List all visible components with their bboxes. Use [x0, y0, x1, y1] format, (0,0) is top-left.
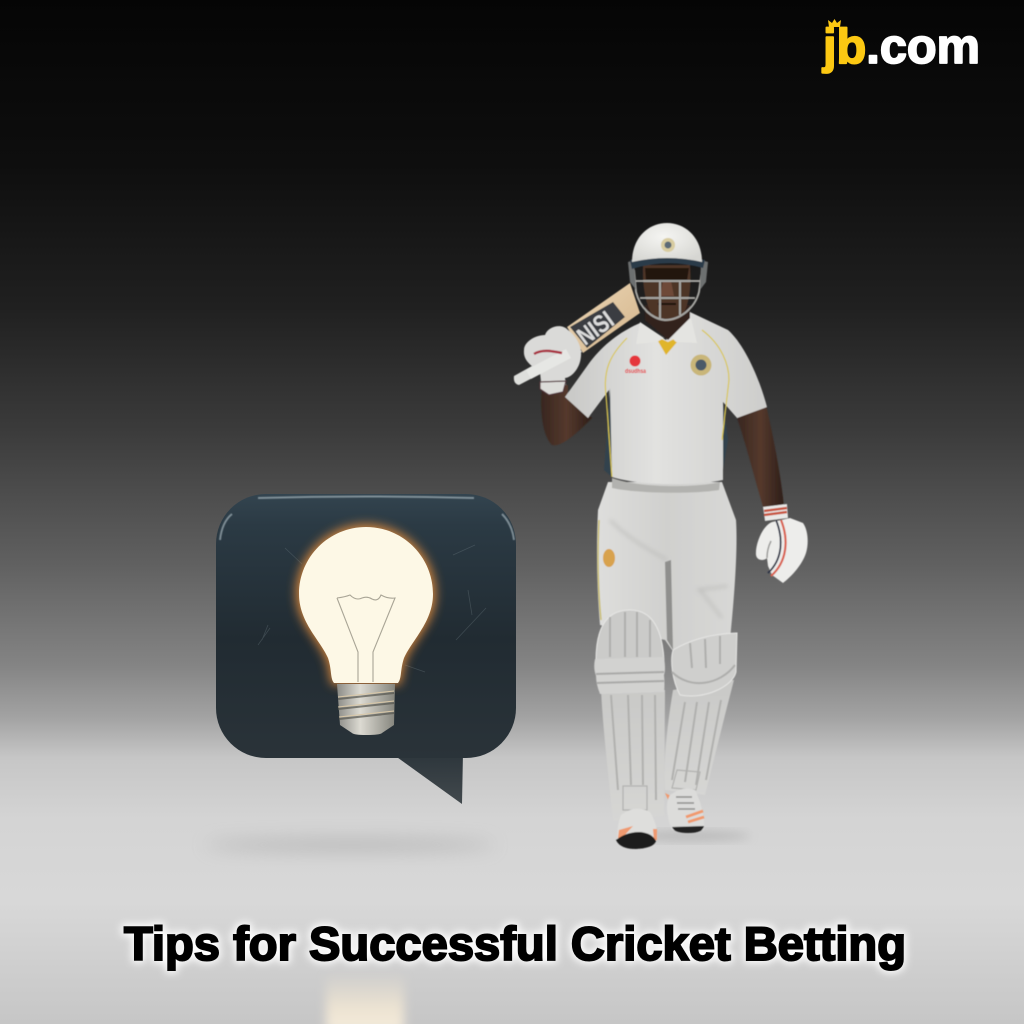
- trousers yellow piping: [598, 520, 601, 620]
- head and helmet: [628, 223, 708, 340]
- mouth shadow: [658, 303, 676, 305]
- bat sticker: [570, 302, 625, 348]
- glove body: [756, 518, 808, 583]
- bulb screw base: [337, 684, 395, 735]
- icon: light bulb: [296, 524, 436, 735]
- upper: [667, 788, 704, 830]
- shirt waistband: [612, 478, 720, 493]
- shirt side panels: [604, 388, 728, 477]
- glove red accent: [534, 351, 562, 354]
- neck: [645, 305, 690, 340]
- sole: [672, 826, 704, 833]
- title white glow: Tips for Successful Cricket Betting: [124, 917, 906, 970]
- bat sticker letters: NISI: [572, 306, 619, 351]
- helmet crest: [661, 238, 675, 252]
- cuff stripes: [764, 508, 787, 515]
- orange toe accents: [618, 826, 657, 840]
- trousers: [597, 482, 737, 650]
- right shoe: [665, 788, 704, 833]
- strap patch: [672, 770, 700, 790]
- shirt yellow piping: [605, 330, 729, 477]
- gap between thighs: [665, 560, 673, 650]
- right batting pad: [665, 633, 737, 795]
- floor shadow under player: [630, 831, 750, 841]
- nose: [660, 281, 674, 296]
- shirt yellow collar inset: [655, 334, 684, 355]
- left shoe: [616, 809, 657, 849]
- cuff: [763, 504, 788, 521]
- player right arm, lowered: [737, 405, 784, 510]
- thumb gap: [767, 541, 771, 558]
- glove body: [524, 326, 581, 385]
- orange stripes: [686, 811, 704, 822]
- bubble glossy highlight: [220, 496, 514, 540]
- cricket player: [514, 223, 808, 849]
- icon: crown: [828, 19, 841, 27]
- trouser crease shadows: [610, 520, 728, 618]
- floor shadow under speech bubble: [205, 839, 495, 851]
- laces: [676, 797, 695, 809]
- shin ribs: [672, 700, 721, 785]
- shirt collar: [636, 314, 697, 344]
- speech bubble with light bulb: [216, 494, 516, 804]
- handle over glove: [526, 349, 571, 379]
- shirt crest badge: [690, 354, 712, 376]
- title text: Tips for Successful Cricket Betting: [124, 917, 906, 970]
- bulb glow: [296, 524, 436, 685]
- cricket bat: [514, 283, 640, 385]
- knee rolls: [594, 657, 665, 694]
- bat handle: [514, 342, 582, 385]
- sponsor name: dsudhsa: [625, 369, 647, 375]
- trouser badge: [603, 549, 615, 567]
- upper: [617, 809, 657, 842]
- bulb glass: [299, 527, 433, 683]
- scratches on bubble: [258, 545, 486, 672]
- floor light reflection: [326, 972, 404, 1024]
- shin section: [665, 680, 734, 795]
- knee section: [596, 610, 664, 660]
- glove cuff: [540, 381, 566, 395]
- batting glove, raised hand: [524, 326, 581, 395]
- sole: [616, 832, 656, 849]
- title: [124, 917, 906, 970]
- batting glove, lowered hand: [756, 504, 808, 583]
- speech bubble tail: [394, 752, 463, 804]
- logo text: jb.com: [822, 20, 980, 74]
- shin section: [601, 690, 665, 821]
- bulb filament: [337, 595, 395, 682]
- glove stripes: [768, 520, 781, 573]
- top ribs: [690, 636, 720, 668]
- bat blade: [567, 283, 640, 353]
- left batting pad: [594, 610, 665, 821]
- sponsor red mark: [630, 356, 640, 366]
- knee ribs: [610, 612, 650, 657]
- brow shadow: [645, 268, 689, 281]
- face: [643, 265, 691, 322]
- shirt: [565, 312, 767, 484]
- helmet dome: [632, 223, 702, 262]
- shin ribs: [611, 695, 656, 800]
- speech bubble body: [216, 494, 516, 758]
- shirt sponsor logo: [625, 356, 647, 375]
- player left arm, raised: [541, 385, 592, 445]
- logo: jb.com: [822, 19, 980, 74]
- helmet grille: [633, 270, 703, 320]
- top knee section: [672, 633, 737, 696]
- screw threads: [338, 693, 394, 719]
- orange heel: [665, 793, 671, 806]
- lower strap patch: [623, 786, 647, 810]
- helmet visor: [630, 256, 705, 269]
- helmet side flaps: [628, 260, 708, 290]
